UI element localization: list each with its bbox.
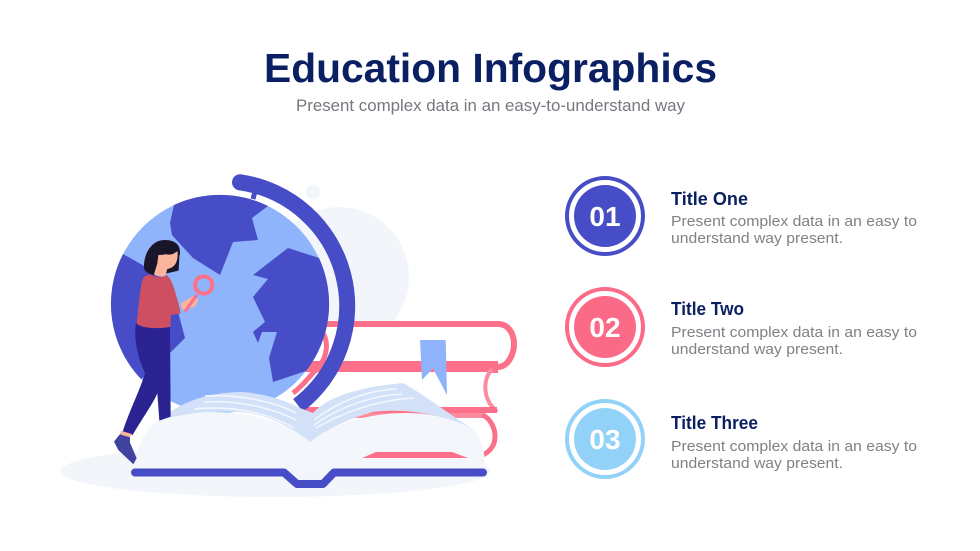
title: Education Infographics bbox=[264, 45, 717, 91]
item 3 bbox=[567, 401, 917, 477]
background shapes bbox=[60, 185, 490, 497]
text: description one: understand way present. bbox=[671, 230, 843, 247]
badge 02: 02 bbox=[589, 312, 621, 343]
globe stand arc bbox=[240, 182, 347, 405]
text: description two: Present complex data in an easy to bbox=[671, 324, 917, 341]
text: description two: understand way present. bbox=[671, 341, 843, 358]
book cover bbox=[135, 472, 483, 484]
text: description three: understand way present. bbox=[671, 455, 843, 472]
heading: title one: Title One bbox=[671, 189, 748, 209]
text: description two bbox=[671, 324, 917, 358]
badge 01: 01 bbox=[589, 201, 621, 232]
icon: bookmark bbox=[420, 340, 447, 395]
text: description one bbox=[671, 213, 917, 247]
text: description one: Present complex data in an easy to bbox=[671, 213, 917, 230]
text: description three: Present complex data in an easy to bbox=[671, 438, 917, 455]
open book bbox=[135, 383, 485, 484]
illustration: education scene bbox=[60, 174, 514, 497]
heading: title three: Title Three bbox=[671, 413, 758, 433]
badge 03: 03 bbox=[589, 424, 621, 455]
badge 02 bbox=[567, 289, 643, 365]
item 1 bbox=[567, 178, 917, 254]
heading: title two: Title Two bbox=[671, 299, 744, 319]
subtitle: Present complex data in an easy-to-understand way bbox=[296, 97, 686, 115]
person with magnifier bbox=[114, 240, 212, 464]
stacked books bbox=[293, 324, 514, 455]
globe bbox=[111, 174, 347, 413]
badge 03 bbox=[567, 401, 643, 477]
badge 01 bbox=[567, 178, 643, 254]
text: description three bbox=[671, 438, 917, 472]
item 2 bbox=[567, 289, 917, 365]
